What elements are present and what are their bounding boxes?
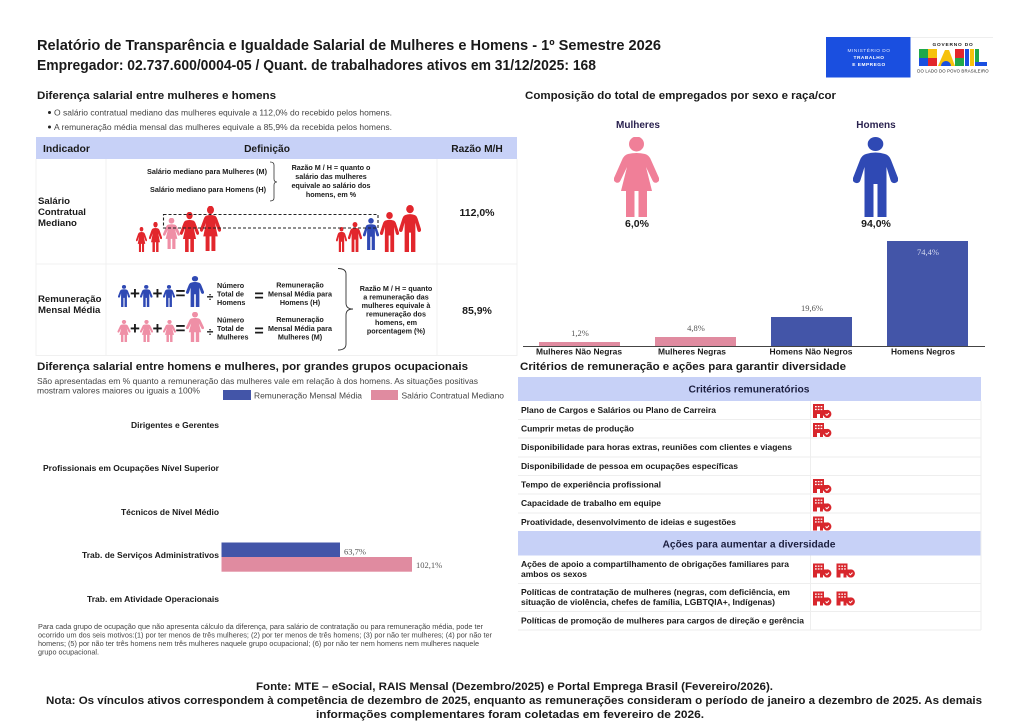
men average formula: + (130, 284, 140, 303)
men average formula: Homens (217, 298, 245, 307)
bar chart: composition: 4,8% (687, 323, 705, 333)
bar chart: occupational groups: Trab. em Atividade Operacionais (87, 595, 220, 604)
icons: actions adopted (813, 564, 855, 606)
footer: source and note: Fonte: MTE – eSocial, RAIS Mensal (Dezembro/2025) e Portal Emprega Brasil (Fevereiro/2026). (256, 681, 773, 693)
bar chart: composition: Homens Negros (891, 348, 956, 356)
median formula text: Razão M / H = quanto o (292, 163, 371, 172)
action rows: Políticas de promoção de mulheres para cargos de direção e gerência (521, 616, 804, 626)
women average formula: Total de (217, 324, 244, 333)
women figures: median (136, 206, 221, 252)
row label: remuneração mensal média: Mensal Média (38, 305, 101, 316)
men average formula: Total de (217, 290, 244, 298)
table header: Definição (244, 144, 290, 155)
men average formula (118, 276, 333, 307)
title: Relatório de Transparência e Igualdade Salarial de Mulheres e Homens - 1º Semestre 2026 (37, 38, 661, 54)
action rows: Políticas de contratação de mulheres (negras, com deficiência, em (521, 588, 790, 597)
footnote: Para cada grupo de ocupação que não apresenta cálculo da diferença, para salário de contratação ou para remuneração média, pode ter (38, 624, 484, 631)
panel: homens share (853, 120, 898, 230)
row label: salário contratual mediano: Contratual (38, 207, 86, 218)
row label: remuneração mensal média (38, 294, 102, 316)
action rows: situação de violência, chefes de família, LGBTQIA+, Indígenas) (521, 598, 775, 607)
subtitle text: mostram valores maiores ou iguais a 100% (37, 386, 200, 396)
average ratio text: remuneração dos (366, 310, 426, 318)
bullet text: O salário contratual mediano das mulheres equivale a 112,0% do recebido pelos homens. (54, 108, 392, 118)
average ratio text: porcentagem (%) (367, 326, 426, 336)
median formula text: Salário mediano para Homens (H) (150, 185, 267, 194)
men figures: median (336, 205, 421, 252)
criteria rows: Tempo de experiência profissional (521, 480, 661, 490)
women average formula: + (130, 319, 140, 338)
title: Empregador: 02.737.600/0004-05 / Quant. de trabalhadores ativos em 31/12/2025: 168 (37, 58, 596, 74)
panel: mulheres share: 6,0% (625, 218, 650, 230)
legend: Salário Contratual Mediano (402, 390, 504, 400)
footer: source and note: informações complementares foram coletadas em fevereiro de 2026. (316, 709, 704, 721)
legend: Remuneração Mensal Média (254, 390, 362, 400)
panel: mulheres share: Mulheres (616, 120, 660, 131)
table header (43, 144, 503, 155)
row label: salário contratual mediano (38, 196, 86, 229)
logo: ministério do trabalho e emprego (826, 37, 910, 78)
men average formula: Remuneração (276, 280, 324, 290)
average ratio text: homens, em (375, 318, 417, 327)
footnote (38, 624, 493, 656)
bar chart: composition (523, 241, 985, 356)
criteria rows: Proatividade, desenvolvimento de ideias e sugestões (521, 518, 736, 527)
footnote: grupo ocupacional. (38, 650, 99, 656)
logo: ministério do trabalho e emprego: MINISTÉRIO DO (847, 47, 891, 54)
footnote: homens; (5) por não ter três homens nem três mulheres naquele grupo ocupacional; (6) por não ter nem homens nem mulheres naquele (38, 641, 479, 648)
legend (223, 390, 504, 400)
criteria rows: Cumprir metas de produção (521, 424, 634, 434)
criteria rows: Capacidade de trabalho em equipe (521, 499, 661, 508)
women average formula: = (176, 319, 186, 338)
criteria rows: Disponibilidade de pessoa em ocupações específicas (521, 462, 738, 471)
women average formula: Mensal Média para (268, 324, 333, 333)
bar chart: occupational groups: Trab. de Serviços Administrativos (82, 551, 220, 560)
subtitle text (37, 376, 478, 396)
table header: Razão M/H (451, 144, 503, 155)
bracket: average (338, 268, 353, 350)
men average formula: Mensal Média para (268, 290, 333, 298)
women average formula: Mulheres (M) (278, 332, 323, 342)
median formula text: homens, em % (306, 190, 357, 199)
bar chart: occupational groups: 63,7% (344, 546, 366, 556)
row label: salário contratual mediano: Mediano (38, 218, 77, 229)
criteria rows: Plano de Cargos e Salários ou Plano de Carreira (521, 406, 716, 415)
heading: critérios: Critérios de remuneração e ações para garantir diversidade (520, 361, 846, 373)
bar chart: occupational groups: Dirigentes e Gerentes (131, 421, 220, 430)
women average formula: + (153, 319, 163, 338)
logo: ministério do trabalho e emprego: TRABALHO (854, 55, 884, 61)
average ratio text: mulheres equivale à (362, 301, 431, 310)
row label: remuneração mensal média: Remuneração (38, 294, 102, 305)
men average formula: + (153, 284, 163, 303)
icons: criteria adopted (813, 404, 831, 531)
value: 112,0%: 112,0% (459, 207, 495, 219)
men average formula: ÷ (207, 290, 214, 304)
panel: indicator table (36, 137, 517, 356)
section header: critérios remuneratórios: Critérios remuneratórios (688, 384, 810, 396)
panel: homens share: Homens (856, 120, 896, 131)
row label: salário contratual mediano: Salário (38, 196, 70, 207)
bar chart: composition: Mulheres Negras (658, 348, 727, 356)
value: 85,9%: 85,9% (462, 305, 493, 317)
table header: Indicador (43, 144, 90, 155)
average ratio text: Razão M / H = quanto (360, 284, 433, 293)
logo: governo do brasil: GOVERNO DO (932, 42, 974, 48)
panel: mulheres share (614, 120, 660, 230)
men average formula: = (254, 288, 264, 305)
median formula text: salário das mulheres (295, 172, 367, 181)
heading: diferença por grupos ocupacionais: Diferença salarial entre homens e mulheres, por grandes grupos ocupacionais (37, 361, 468, 373)
section header: ações: Ações para aumentar a diversidade (662, 540, 836, 550)
logo: governo do brasil (911, 37, 993, 78)
action rows: ambos os sexos (521, 570, 587, 579)
bullet text (48, 108, 392, 132)
bar chart: composition: Mulheres Não Negras (536, 348, 623, 356)
panel: criteria table (518, 377, 981, 630)
median formula text: equivale ao salário dos (291, 181, 371, 190)
men average formula: Número (217, 281, 245, 290)
bar chart: composition: Homens Não Negros (770, 348, 853, 356)
footer: source and note: Nota: Os vínculos ativos correspondem à competência de dezembro de 2025, enquanto as remunerações consideram o período de janeiro a dezembro de 2025. As demais (46, 695, 982, 707)
heading: composição: Composição do total de empregados por sexo e raça/cor (525, 90, 837, 102)
women average formula: = (254, 323, 264, 340)
men average formula: = (176, 284, 186, 303)
logo: ministério do trabalho e emprego: E EMPREGO (852, 62, 886, 68)
women average formula: Remuneração (276, 315, 324, 324)
criteria rows (521, 406, 792, 527)
women average formula: Mulheres (217, 332, 249, 342)
bracket: median (270, 162, 277, 201)
dashed median band (164, 214, 378, 228)
heading: diferença salarial: Diferença salarial entre mulheres e homens (37, 90, 276, 102)
women average formula (117, 312, 333, 342)
bar chart: occupational groups: Profissionais em Ocupações Nível Superior (43, 464, 219, 473)
men average formula: Homens (H) (280, 298, 321, 307)
footer: source and note (46, 681, 982, 721)
average ratio text: a remuneração das (363, 292, 429, 302)
bar chart: composition: 74,4% (917, 247, 939, 257)
action rows: Ações de apoio a compartilhamento de obrigações familiares para (521, 560, 789, 569)
median formula text: Salário mediano para Mulheres (M) (147, 167, 268, 176)
action rows (521, 560, 804, 626)
footnote: ocorrido um dos seis motivos:(1) por ter menos de três mulheres; (2) por ter menos de três homens; (3) por não ter mulheres; (4) por não ter (38, 632, 493, 640)
women average formula: Número (217, 316, 245, 324)
bar chart: composition: 1,2% (571, 328, 589, 338)
bullet text: A remuneração média mensal das mulheres equivale a 85,9% da recebida pelos homens. (54, 123, 392, 132)
panel: homens share: 94,0% (861, 218, 892, 230)
bar chart: composition: 19,6% (801, 303, 823, 313)
bar chart: occupational groups: 102,1% (416, 560, 442, 570)
criteria rows: Disponibilidade para horas extras, reuniões com clientes e viagens (521, 443, 792, 452)
title (37, 38, 661, 74)
median formula text (147, 163, 371, 199)
average ratio text (360, 284, 433, 336)
women average formula: ÷ (207, 325, 214, 339)
subtitle text: São apresentadas em % quanto a remuneração das mulheres vale em relação à dos homens. As situações positivas (37, 376, 478, 386)
logo: governo do brasil: DO LADO DO POVO BRASILEIRO (917, 68, 989, 74)
bar chart: occupational groups (43, 421, 442, 604)
bar chart: occupational groups: Técnicos de Nível Médio (121, 508, 219, 517)
